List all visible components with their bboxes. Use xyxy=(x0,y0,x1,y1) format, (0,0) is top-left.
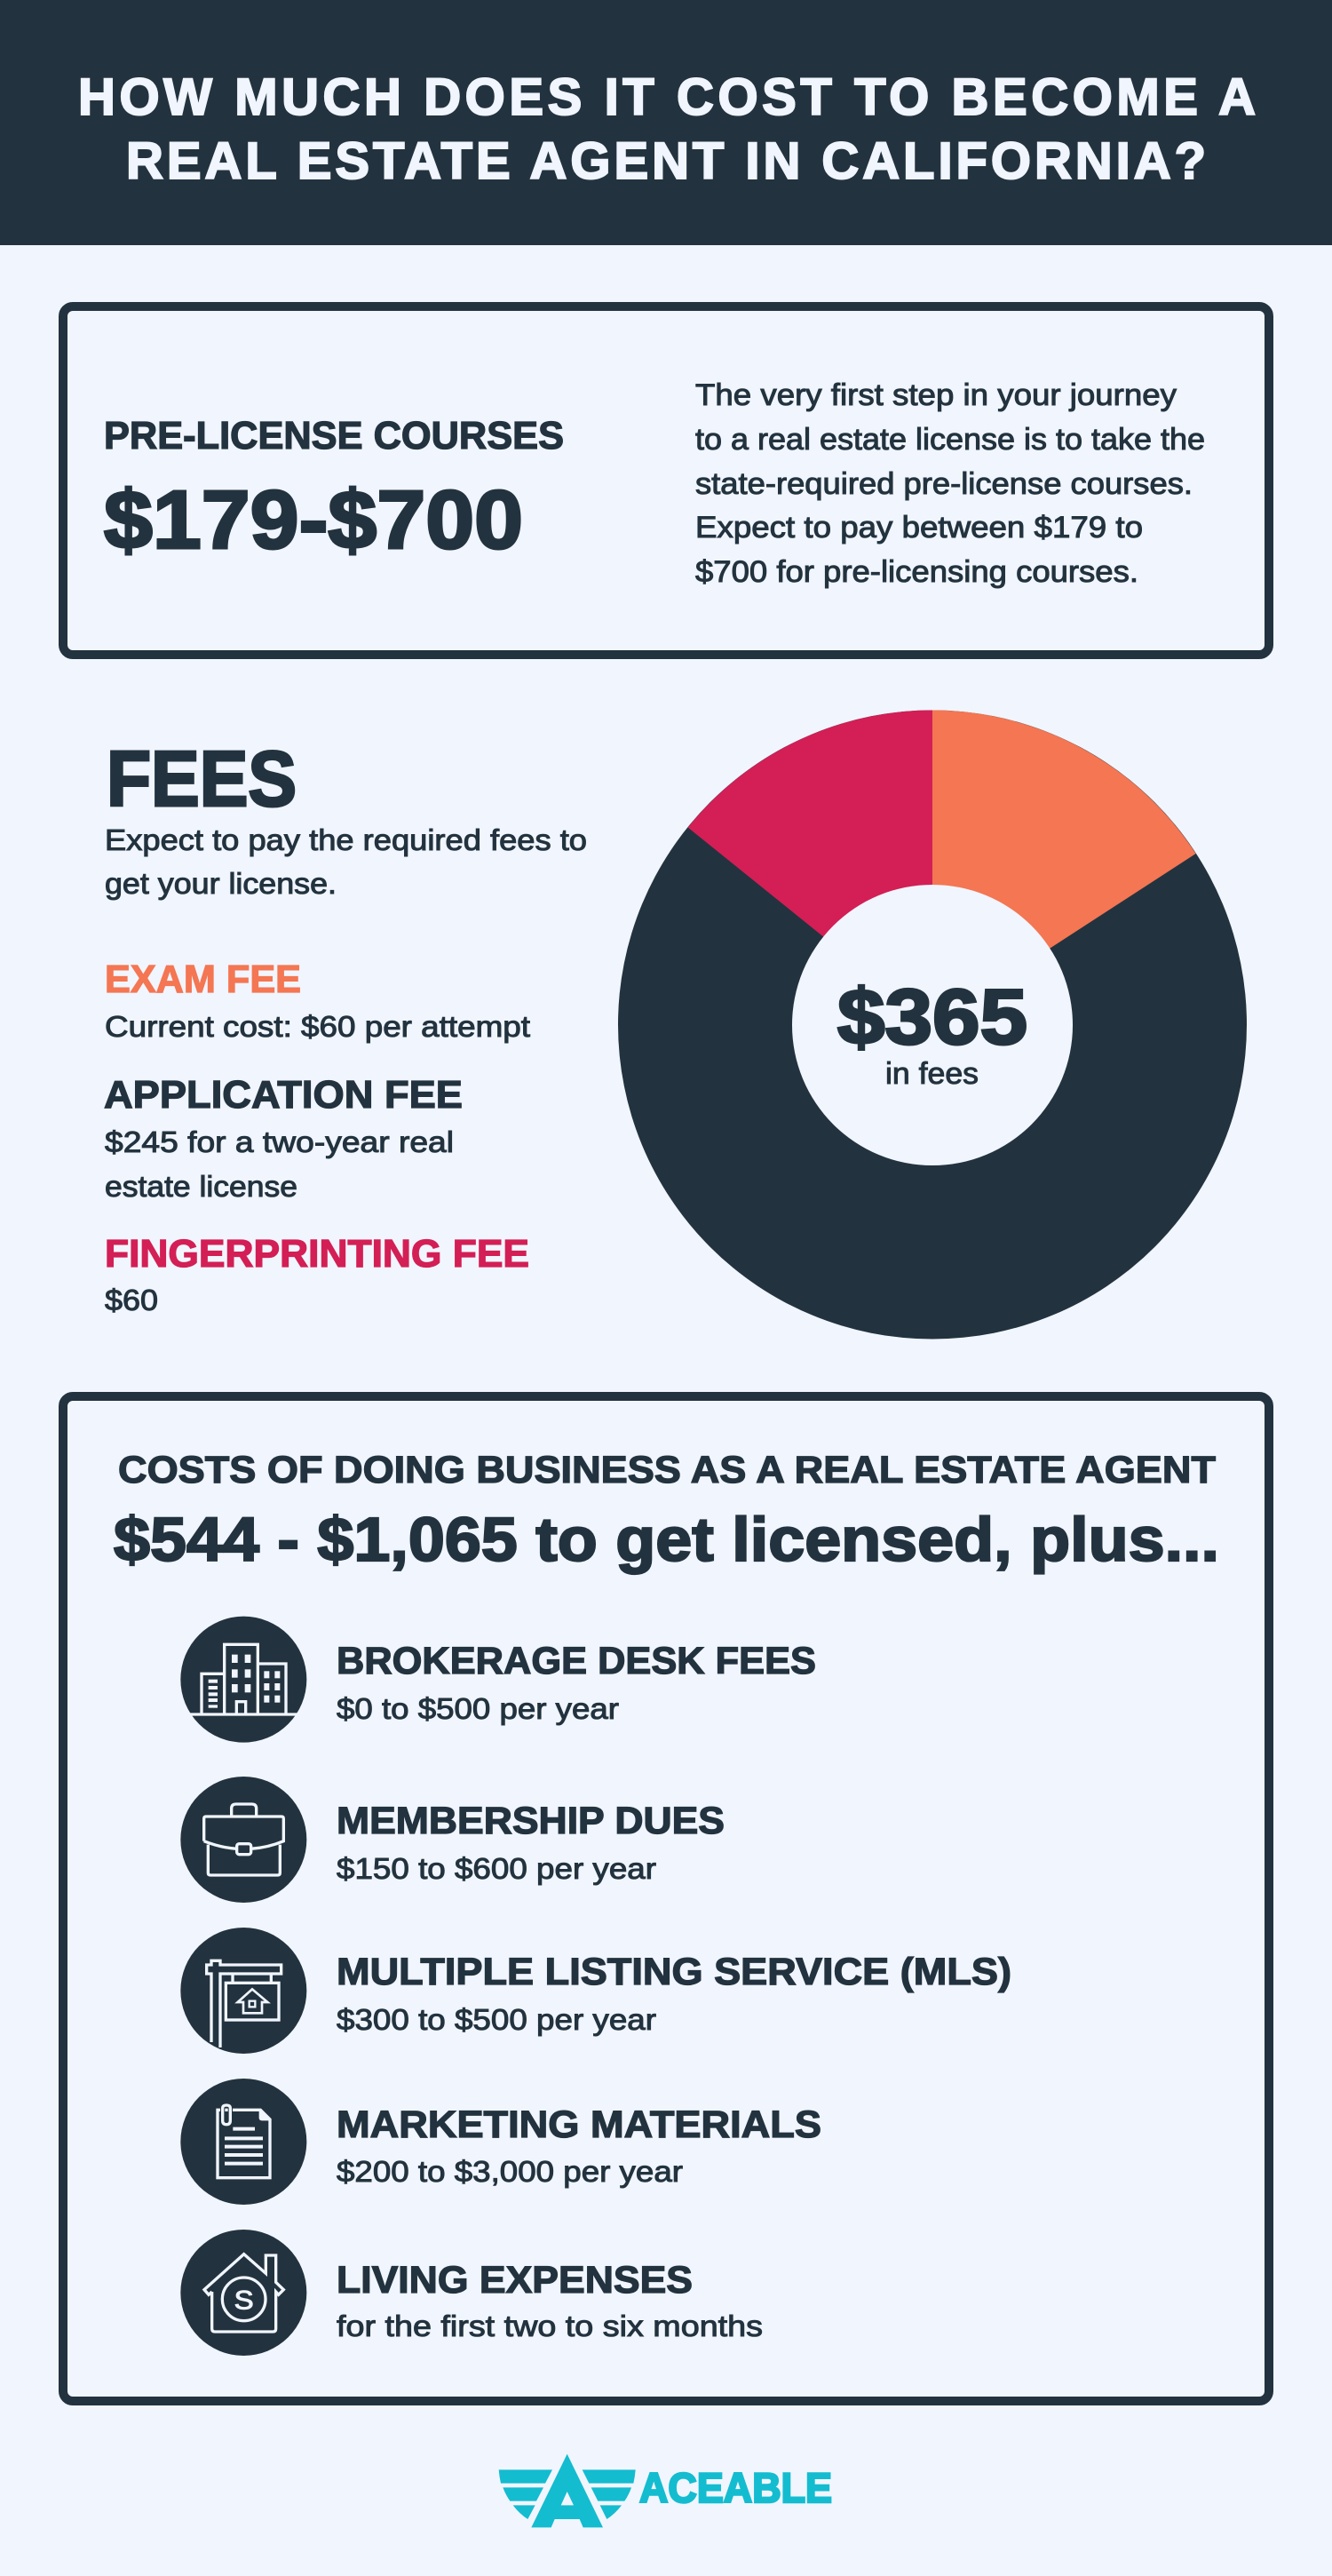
item: multiple listing service xyxy=(180,1928,1011,2054)
description text: state-required pre-license courses. xyxy=(695,467,1193,501)
item: marketing materials xyxy=(180,2079,821,2205)
item: multiple listing service: MULTIPLE LISTING SERVICE (MLS) xyxy=(337,1951,1011,1993)
heading: pre-license courses: PRE-LICENSE COURSES xyxy=(104,414,564,457)
icon: house with dollar coin xyxy=(180,2230,306,2356)
description text: to a real estate license is to take the xyxy=(695,423,1205,457)
item: membership dues: MEMBERSHIP DUES xyxy=(337,1800,725,1842)
application fee: $245 for a two-year real xyxy=(105,1125,454,1158)
description text xyxy=(695,378,1205,589)
exam fee xyxy=(105,958,530,1043)
application fee xyxy=(104,1073,463,1203)
exam fee: Current cost: $60 per attempt xyxy=(105,1010,530,1043)
title: HOW MUCH DOES IT COST TO BECOME A xyxy=(78,68,1256,126)
item: membership dues xyxy=(180,1777,725,1903)
item: membership dues: $150 to $600 per year xyxy=(337,1852,656,1885)
heading: fees: FEES xyxy=(107,735,297,823)
donut center label xyxy=(837,973,1027,1091)
heading: costs of doing business: COSTS OF DOING BUSINESS AS A REAL ESTATE AGENT xyxy=(118,1449,1216,1491)
fingerprinting fee xyxy=(105,1232,529,1316)
panel: pre-license courses xyxy=(63,306,1269,655)
donut center label: in fees xyxy=(885,1057,979,1091)
icon: document with paperclip xyxy=(180,2079,306,2205)
logo: Aceable xyxy=(499,2454,832,2527)
subheading: total cost: $544 - $1,065 to get licensed, plus... xyxy=(114,1505,1219,1574)
application fee: estate license xyxy=(105,1170,297,1203)
item: marketing materials: $200 to $3,000 per year xyxy=(337,2155,683,2188)
description text: Expect to pay between $179 to xyxy=(695,511,1143,545)
fees intro text xyxy=(105,823,587,900)
exam fee: EXAM FEE xyxy=(105,958,301,1001)
fingerprinting fee: FINGERPRINTING FEE xyxy=(105,1232,529,1276)
price range: $179-$700 xyxy=(104,473,523,566)
icon: briefcase xyxy=(180,1777,306,1903)
title xyxy=(78,68,1256,190)
description text: The very first step in your journey xyxy=(695,378,1177,412)
item: living expenses: LIVING EXPENSES xyxy=(337,2259,693,2302)
item: marketing materials: MARKETING MATERIALS xyxy=(337,2103,821,2146)
icon: real estate sign xyxy=(180,1928,306,2054)
icon: winged A xyxy=(499,2454,636,2527)
title: REAL ESTATE AGENT IN CALIFORNIA? xyxy=(126,132,1206,190)
item: brokerage desk fees: $0 to $500 per year xyxy=(337,1692,619,1725)
item: multiple listing service: $300 to $500 per year xyxy=(337,2003,656,2036)
fees intro text: Expect to pay the required fees to xyxy=(105,823,587,856)
icon: house with dollar coin: S xyxy=(234,2286,254,2315)
fingerprinting fee: $60 xyxy=(105,1284,158,1316)
slice: fingerprinting fee xyxy=(688,711,932,1025)
donut center label: $365 xyxy=(837,973,1027,1061)
item: brokerage desk fees xyxy=(180,1617,816,1743)
slice: exam fee xyxy=(932,711,1196,1025)
panel: costs of doing business xyxy=(63,1396,1269,2401)
panel: fees list xyxy=(104,735,587,1316)
description text: $700 for pre-licensing courses. xyxy=(695,555,1138,589)
item: brokerage desk fees: BROKERAGE DESK FEES xyxy=(337,1640,816,1682)
fees intro text: get your license. xyxy=(105,867,337,900)
item: living expenses xyxy=(180,2230,763,2356)
header banner xyxy=(0,0,1332,245)
logo: Aceable: ACEABLE xyxy=(639,2464,832,2511)
item: living expenses: for the first two to six months xyxy=(337,2310,763,2342)
icon: office buildings xyxy=(180,1617,306,1743)
application fee: APPLICATION FEE xyxy=(104,1073,463,1117)
donut chart: fees xyxy=(618,711,1247,1340)
